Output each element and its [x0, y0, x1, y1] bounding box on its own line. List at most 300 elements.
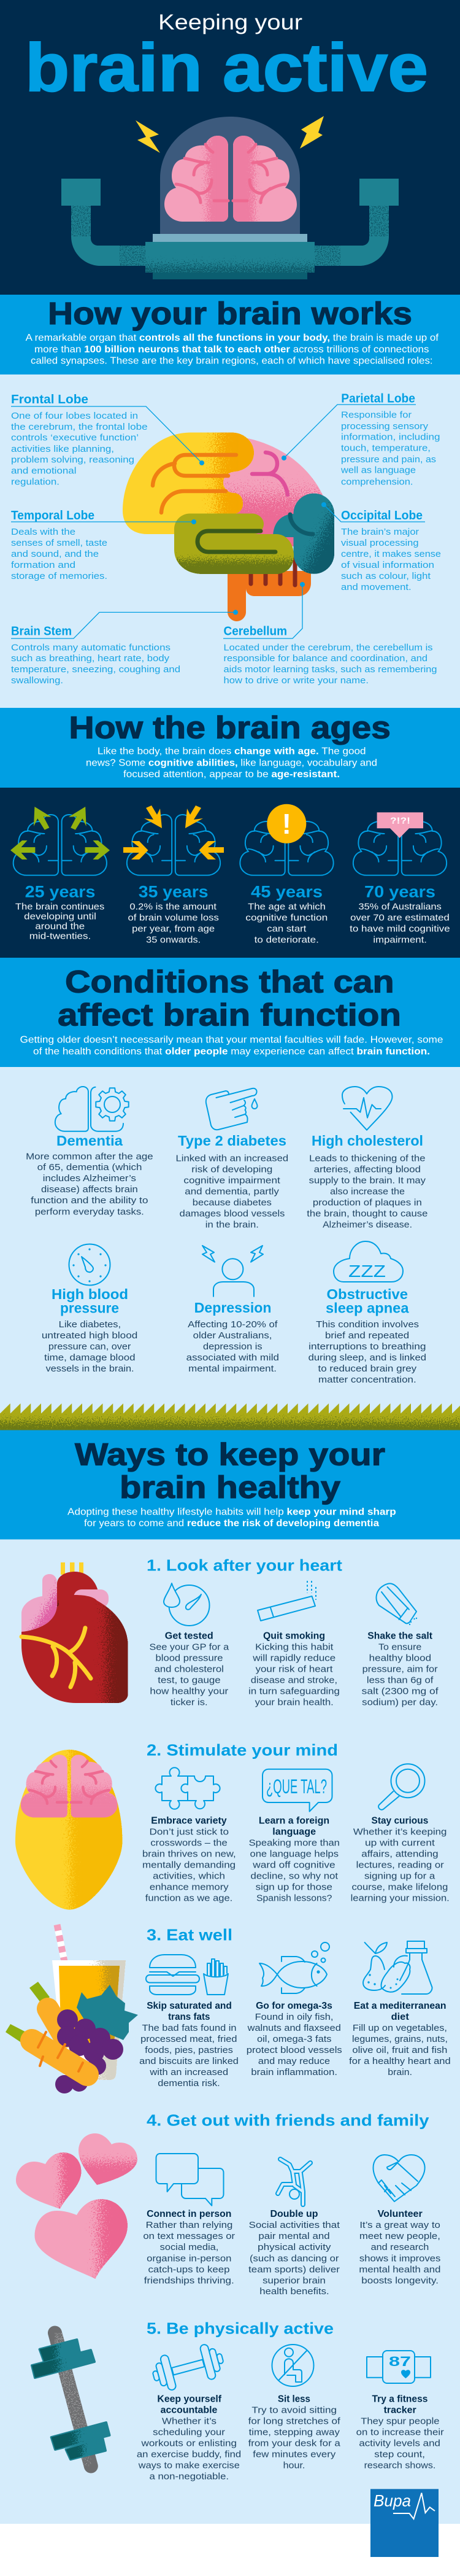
parietal lobe: [221, 436, 326, 546]
icon: fitness tracker: [367, 2351, 431, 2383]
text: also increase the: [330, 1187, 405, 1197]
text: Spanish lessons?: [256, 1893, 332, 1904]
text: [248, 1631, 340, 1707]
icon: brain with warning: [240, 804, 334, 875]
tip: connect in person: [143, 2154, 235, 2286]
text: decline, so why not: [250, 1871, 339, 1882]
text: brain inflammation.: [251, 2067, 337, 2077]
heading: Ways to keep your brain healthy: [75, 1437, 385, 1505]
text: organise in-person: [147, 2253, 231, 2264]
label: cerebellum: how to drive or write your name.: [223, 676, 369, 686]
condition: dementia: [26, 1087, 153, 1217]
heading: Conditions that can affect brain function: affect brain function: [58, 998, 401, 1033]
text: from your desk for a: [248, 2438, 341, 2449]
text: to reduced brain grey: [318, 1364, 417, 1374]
text: disease and stroke,: [251, 1675, 337, 1686]
label: brain stem: [11, 625, 180, 686]
heart body: [21, 1595, 128, 1703]
condition: obstructive sleep apnea: [309, 1241, 426, 1385]
ageing intro text: [86, 746, 377, 780]
text: [349, 2001, 451, 2077]
label: frontal lobe: regulation.: [11, 477, 59, 487]
ways intro text: for years to come and reduce the risk of developing dementia: [84, 1518, 379, 1529]
text: [248, 2209, 340, 2297]
text: health benefits.: [259, 2286, 329, 2297]
icon: cloud with ZZZ: [334, 1241, 403, 1282]
tip: volunteer: [359, 2155, 440, 2286]
icon: handshake heart: [373, 2155, 425, 2202]
text: 45 years: [251, 883, 323, 901]
text: because diabetes: [193, 1198, 272, 1208]
text: team sports) deliver: [248, 2264, 340, 2275]
label: parietal lobe: Responsible for: [341, 410, 412, 420]
column: 35 years: [123, 805, 224, 945]
text: (such as dancing or: [250, 2253, 339, 2264]
panel: ageing timeline: [0, 788, 460, 958]
text: your brain health.: [255, 1697, 334, 1707]
text: on text messages or: [143, 2231, 235, 2241]
text: how healthy your: [150, 1686, 228, 1697]
text: and may reduce: [258, 2056, 330, 2066]
text: Kicking this habit: [255, 1642, 334, 1652]
text: interruptions to breathing: [309, 1341, 426, 1352]
label: brain stem: temperature, sneezing, coughing and: [11, 665, 180, 675]
illustration: juice and vegetables: [6, 1925, 138, 2093]
text: protect blood vessels: [247, 2045, 342, 2055]
text: meet new people,: [359, 2231, 440, 2241]
text: Learn a foreign: [259, 1816, 329, 1826]
text: associated with mild: [186, 1352, 279, 1363]
text: [350, 883, 450, 945]
icon: no sitting: [272, 2345, 314, 2386]
text: crosswords – the: [150, 1838, 228, 1849]
text: More common after the age: [26, 1151, 153, 1162]
grass strip: [0, 1403, 460, 1430]
pipe connector boxes: [61, 179, 399, 206]
label: frontal lobe: controls ‘executive function’: [11, 433, 139, 443]
text: [351, 1816, 450, 1904]
label: frontal lobe: and emotional: [11, 467, 76, 476]
right pink vessel: [74, 1589, 109, 1608]
text: during sleep, and is linked: [309, 1352, 426, 1363]
pink brain: [164, 136, 297, 222]
label: occipital lobe: The brain’s major: [341, 527, 419, 537]
text: diet: [391, 2012, 409, 2022]
icon: puzzle pieces: [155, 1767, 220, 1809]
label: parietal lobe: [340, 392, 440, 487]
text: cognitive function: [245, 913, 328, 923]
conditions intro text: Getting older doesn’t necessarily mean that your mental faculties will fade. However, some: [20, 1034, 443, 1045]
text: 35 years: [139, 883, 209, 901]
label: parietal lobe: information, including: [341, 433, 440, 443]
text: and dementia, partly: [185, 1187, 279, 1197]
label: brain stem: such as breathing, heart rate, body: [11, 654, 170, 664]
text: olive oil, fruit and fish: [352, 2045, 447, 2055]
text: shows it improves: [359, 2253, 440, 2264]
coronary vessels: [21, 1628, 91, 1687]
aorta: [57, 1572, 98, 1612]
label: temporal lobe: Temporal Lobe: [11, 509, 94, 522]
text: brain thrives on new,: [142, 1849, 236, 1860]
text: brain.: [388, 2067, 412, 2077]
text: developing until: [24, 911, 96, 921]
text: matter concentration.: [318, 1375, 416, 1385]
heading: Ways to keep your brain healthy: Ways to keep your: [75, 1437, 385, 1472]
icon: speech bubble: ¿QUE TAL?: [266, 1775, 327, 1798]
text: activity levels and: [359, 2438, 440, 2449]
text: [247, 2001, 342, 2077]
text: step count,: [374, 2450, 425, 2460]
text: [143, 2209, 235, 2286]
text: course, make lifelong: [352, 1882, 448, 1893]
tip: double up: [248, 2159, 340, 2297]
heading: 4. Get out with friends and family: 4. Get out with friends and family: [147, 2111, 429, 2130]
text: [249, 1816, 340, 1904]
icon: brain with confused speech bubble: [353, 812, 447, 875]
title: Keeping your: Keeping your: [158, 10, 302, 34]
text: to have mild cognitive: [350, 924, 450, 934]
icon: brain with warning: !: [282, 808, 291, 840]
panel: header: [0, 0, 460, 295]
heading: How the brain ages: How the brain ages: [69, 710, 391, 745]
text: The bad fats found in: [142, 2023, 237, 2033]
text: salt (2300 mg of: [362, 1686, 439, 1697]
text: perform everyday tasks.: [35, 1206, 144, 1217]
text: function as we age.: [145, 1893, 232, 1904]
text: accountable: [161, 2405, 218, 2416]
text: test, to gauge: [158, 1675, 221, 1686]
panel: brain regions: [0, 374, 460, 708]
text: learning your mission.: [351, 1893, 450, 1904]
label: frontal lobe: activities like planning,: [11, 444, 114, 454]
illustration: head with brain: [15, 1750, 123, 1910]
temporal lobe: [174, 513, 294, 574]
text: mental impairment.: [188, 1364, 277, 1374]
label: occipital lobe: Occipital Lobe: [341, 509, 423, 522]
icon: cartwheel figure: [278, 2159, 310, 2205]
tip: learn a foreign language: [249, 1769, 340, 1904]
text: walnuts and flaxseed: [247, 2023, 341, 2033]
text: pressure, aim for: [362, 1664, 438, 1674]
text: for a healthy heart and: [349, 2056, 451, 2066]
text: boosts longevity.: [361, 2275, 439, 2286]
text: up with current: [365, 1838, 435, 1849]
icon: speech bubble: [263, 1769, 332, 1812]
text: in turn safeguarding: [248, 1686, 340, 1697]
icon: brain and gear: [55, 1087, 129, 1131]
heading: 2. Stimulate your mind: 2. Stimulate your mind: [147, 1740, 338, 1759]
text: 0.2% is the amount: [129, 902, 217, 912]
text: less than 6g of: [367, 1675, 434, 1686]
icon: brain with shrinking arrows: [123, 805, 224, 875]
text: Try a fitness: [372, 2394, 427, 2405]
top plates: [32, 2340, 94, 2378]
pipes: [71, 206, 389, 266]
text: will rapidly reduce: [252, 1653, 335, 1663]
text: [307, 1133, 427, 1230]
heading: Conditions that can affect brain function: Conditions that can: [65, 964, 394, 999]
text: [42, 1286, 137, 1374]
label: frontal lobe: problem solving, reasoning: [11, 456, 134, 465]
icon: fish and bubbles: [259, 1942, 329, 1993]
text: over 70 are estimated: [350, 913, 450, 923]
text: They spur people: [361, 2416, 439, 2427]
glass: [52, 1960, 126, 2080]
text: Type 2 diabetes: [178, 1133, 286, 1149]
panel: conditions heading: [0, 958, 460, 1067]
text: Depression: [194, 1300, 271, 1316]
text: trans fats: [168, 2012, 210, 2022]
text: impairment.: [373, 935, 427, 945]
text: Obstructive: [326, 1286, 408, 1302]
text: 35 onwards.: [146, 935, 201, 945]
label: occipital lobe: visual processing: [341, 538, 418, 548]
label: temporal lobe: storage of memories.: [11, 572, 107, 581]
text: around the: [35, 921, 85, 931]
heading: 3. Eat well: 3. Eat well: [147, 1926, 232, 1944]
text: Get tested: [165, 1631, 213, 1641]
label: brain stem: Brain Stem: [11, 625, 72, 638]
intro text: called synapses. These are the key brain regions, each of which have specialised roles:: [31, 356, 433, 366]
label: temporal lobe: [11, 509, 107, 581]
text: sodium) per day.: [362, 1697, 438, 1707]
text: the brain, thought to cause: [307, 1209, 427, 1219]
text: [26, 1133, 153, 1217]
label: temporal lobe: senses of smell, taste: [11, 538, 107, 548]
text: Fill up on vegetables,: [353, 2023, 447, 2033]
text: ways to make exercise: [138, 2461, 240, 2471]
ways intro text: [67, 1507, 396, 1529]
label: parietal lobe: Parietal Lobe: [341, 392, 415, 405]
machine base: [145, 234, 315, 279]
text: [359, 2209, 440, 2286]
text: Don’t just stick to: [150, 1827, 229, 1837]
text: hour.: [283, 2461, 305, 2471]
text: High blood: [52, 1286, 128, 1302]
tip: sit less: [248, 2345, 341, 2471]
label: occipital lobe: [341, 509, 441, 592]
text: 70 years: [364, 883, 435, 901]
text: [137, 2394, 241, 2482]
leaves: [77, 1985, 138, 2040]
left atrium: [21, 1574, 57, 1632]
text: This condition involves: [316, 1319, 419, 1330]
text: Found in oily fish,: [255, 2012, 333, 2022]
label: occipital lobe: centre, it makes sense: [341, 549, 441, 559]
text: Double up: [270, 2209, 318, 2219]
text: Go for omega-3s: [256, 2001, 332, 2011]
column: 45 years: [240, 804, 334, 945]
illustration: heart: [21, 1562, 128, 1703]
tip: quit smoking: [248, 1581, 340, 1707]
text: foods, pies, pastries: [145, 2045, 233, 2055]
text: mental health and: [359, 2264, 440, 2275]
text: per year, from age: [132, 924, 215, 934]
icon: person with lightning: [202, 1246, 263, 1297]
label: occipital lobe: such as colour, light: [341, 572, 431, 581]
ways intro text: Adopting these healthy lifestyle habits will help keep your mind sharp: [67, 1507, 396, 1517]
text: Skip saturated and: [147, 2001, 232, 2011]
heading: 5. Be physically active: 5. Be physically active: [147, 2319, 334, 2338]
text: and biscuits are linked: [139, 2056, 239, 2066]
text: ward off cognitive: [252, 1860, 335, 1871]
text: pressure: [60, 1300, 119, 1316]
text: of brain volume loss: [128, 913, 219, 923]
text: arteries, affecting blood: [314, 1165, 421, 1175]
text: sign up for those: [256, 1882, 332, 1893]
carrot stems: [6, 1982, 50, 2043]
icon: dumbbell: [149, 2341, 227, 2394]
icon: chat bubbles: [156, 2154, 223, 2206]
text: processed meat, fried: [140, 2034, 237, 2044]
icon: pear, lemon and oil bottle: [363, 1941, 432, 1994]
text: disease) affects brain: [41, 1184, 138, 1195]
label: parietal lobe: processing sensory: [341, 422, 429, 432]
text: healthy blood: [369, 1653, 431, 1663]
text: physical activity: [258, 2242, 331, 2252]
column: 25 years: [10, 807, 110, 941]
text: signing up for a: [364, 1871, 435, 1882]
label: occipital lobe: and movement.: [341, 583, 412, 592]
text: lectures, reading or: [356, 1860, 444, 1871]
text: [309, 1286, 426, 1385]
text: vessels in the brain.: [46, 1364, 134, 1374]
icon: magnifying glass: [378, 1764, 424, 1810]
text: 25 years: [25, 883, 95, 901]
text: includes Alzheimer’s: [43, 1173, 136, 1184]
ageing intro text: focused attention, appear to be age-resistant.: [123, 769, 340, 780]
tip: try a fitness tracker: [356, 2351, 444, 2471]
text: mid-twenties.: [29, 931, 91, 941]
illustration: three hearts: [16, 2133, 137, 2279]
icon: heart with pulse: [342, 1087, 393, 1130]
brain stem and cerebellum: [228, 556, 311, 621]
text: 35% of Australians: [358, 902, 442, 912]
column: 70 years: [350, 812, 450, 945]
grapes: [55, 2009, 123, 2093]
label: frontal lobe: [11, 393, 148, 487]
text: for long stretches of: [248, 2416, 341, 2427]
heading: 1. Look after your heart: 1. Look after your heart: [147, 1556, 342, 1574]
text: Embrace variety: [151, 1816, 227, 1826]
label: parietal lobe: touch, temperature,: [341, 443, 431, 453]
text: with an increased: [149, 2067, 228, 2077]
text: your risk of heart: [256, 1664, 333, 1674]
text: The age at which: [248, 902, 326, 912]
text: Keep yourself: [157, 2394, 222, 2405]
label: brain stem: swallowing.: [11, 676, 63, 686]
text: of 65, dementia (which: [37, 1162, 142, 1173]
intro text: more than 100 billion neurons that talk to each other across trillions of connections: [34, 344, 429, 355]
text: and research: [371, 2242, 429, 2252]
tip: shake the salt: [362, 1583, 439, 1707]
text: catch-ups to keep: [148, 2264, 229, 2275]
condition: high cholesterol: [307, 1087, 427, 1230]
text: untreated high blood: [42, 1330, 137, 1341]
text: [142, 1816, 236, 1904]
text: [245, 883, 328, 945]
text: [128, 883, 219, 945]
text: Quit smoking: [263, 1631, 325, 1641]
icon: fitness tracker: 87: [389, 2354, 411, 2369]
text: affairs, attending: [361, 1849, 439, 1860]
text: The brain continues: [15, 902, 104, 912]
text: risk of developing: [191, 1165, 272, 1175]
text: time, stepping away: [249, 2427, 340, 2438]
text: Shake the salt: [367, 1631, 432, 1641]
text: damages blood vessels: [180, 1209, 285, 1219]
label: parietal lobe: comprehension.: [341, 477, 413, 487]
text: [175, 1133, 288, 1230]
arteries top: [61, 1562, 83, 1575]
text: an exercise buddy, find: [137, 2450, 241, 2460]
tip: keep yourself accountable: [137, 2341, 241, 2482]
label: parietal lobe: pressure and pain, as: [341, 455, 436, 465]
label: brain stem: Controls many automatic functions: [11, 643, 171, 653]
text: research shows.: [364, 2461, 435, 2471]
icon: burger and fries: [146, 1955, 228, 1995]
text: friendships thriving.: [144, 2275, 234, 2286]
label: cerebellum: [223, 625, 437, 686]
label: cerebellum: Cerebellum: [223, 625, 287, 638]
label: frontal lobe: the cerebrum, the frontal lobe: [11, 422, 148, 432]
text: Speaking more than: [249, 1838, 340, 1849]
tip: stay curious: [351, 1764, 450, 1904]
text: Leads to thickening of the: [309, 1154, 426, 1164]
heading: How your brain works: How your brain works: [48, 296, 412, 331]
text: few minutes every: [253, 2450, 336, 2460]
icon: finger and blood drop: [206, 1088, 258, 1130]
text: on to increase their: [356, 2427, 444, 2438]
text: function and the ability to: [31, 1195, 148, 1206]
text: brief and repeated: [325, 1330, 409, 1341]
text: Alzheimer’s disease.: [323, 1219, 412, 1230]
text: supply to the brain. It may: [309, 1176, 426, 1186]
text: [139, 2001, 239, 2089]
glass dome: [160, 117, 300, 234]
panel: conditions: [0, 1067, 460, 1414]
label: cerebellum: aids motor learning tasks, such as remembering: [223, 665, 437, 675]
illustration: brain machine: [61, 116, 399, 279]
text: [15, 883, 104, 941]
tip: embrace variety: [142, 1767, 236, 1904]
lightning bolts: [136, 116, 324, 153]
text: High cholesterol: [312, 1133, 423, 1149]
icon: brain with confused speech bubble: ?!?!: [390, 816, 410, 826]
text: sleep apnea: [326, 1300, 409, 1316]
text: workouts or enlisting: [140, 2438, 237, 2449]
text: See your GP for a: [150, 1642, 229, 1652]
icon: cloud with ZZZ: ZZZ: [348, 1262, 386, 1281]
text: tracker: [384, 2405, 416, 2416]
label: cerebellum: Located under the cerebrum, the cerebellum is: [223, 643, 433, 653]
label: temporal lobe: formation and: [11, 561, 75, 570]
text: to deteriorate.: [255, 935, 319, 945]
label: parietal lobe: well as language: [340, 466, 416, 476]
label: frontal lobe: Frontal Lobe: [11, 393, 88, 406]
text: in the brain.: [205, 1219, 259, 1230]
text: activities, which: [153, 1871, 225, 1882]
heading: Conditions that can affect brain function: [58, 964, 401, 1033]
label: frontal lobe: One of four lobes located in: [11, 411, 138, 421]
text: blood pressure: [156, 1653, 223, 1663]
text: Dementia: [56, 1133, 123, 1149]
illustration: barbell: [32, 2333, 109, 2466]
frontal lobe: [123, 432, 254, 534]
text: a non-negotiable.: [150, 2472, 229, 2482]
logo: Bupa: Bupa: [374, 2492, 411, 2510]
icon: gauge and drop: [164, 1583, 210, 1626]
